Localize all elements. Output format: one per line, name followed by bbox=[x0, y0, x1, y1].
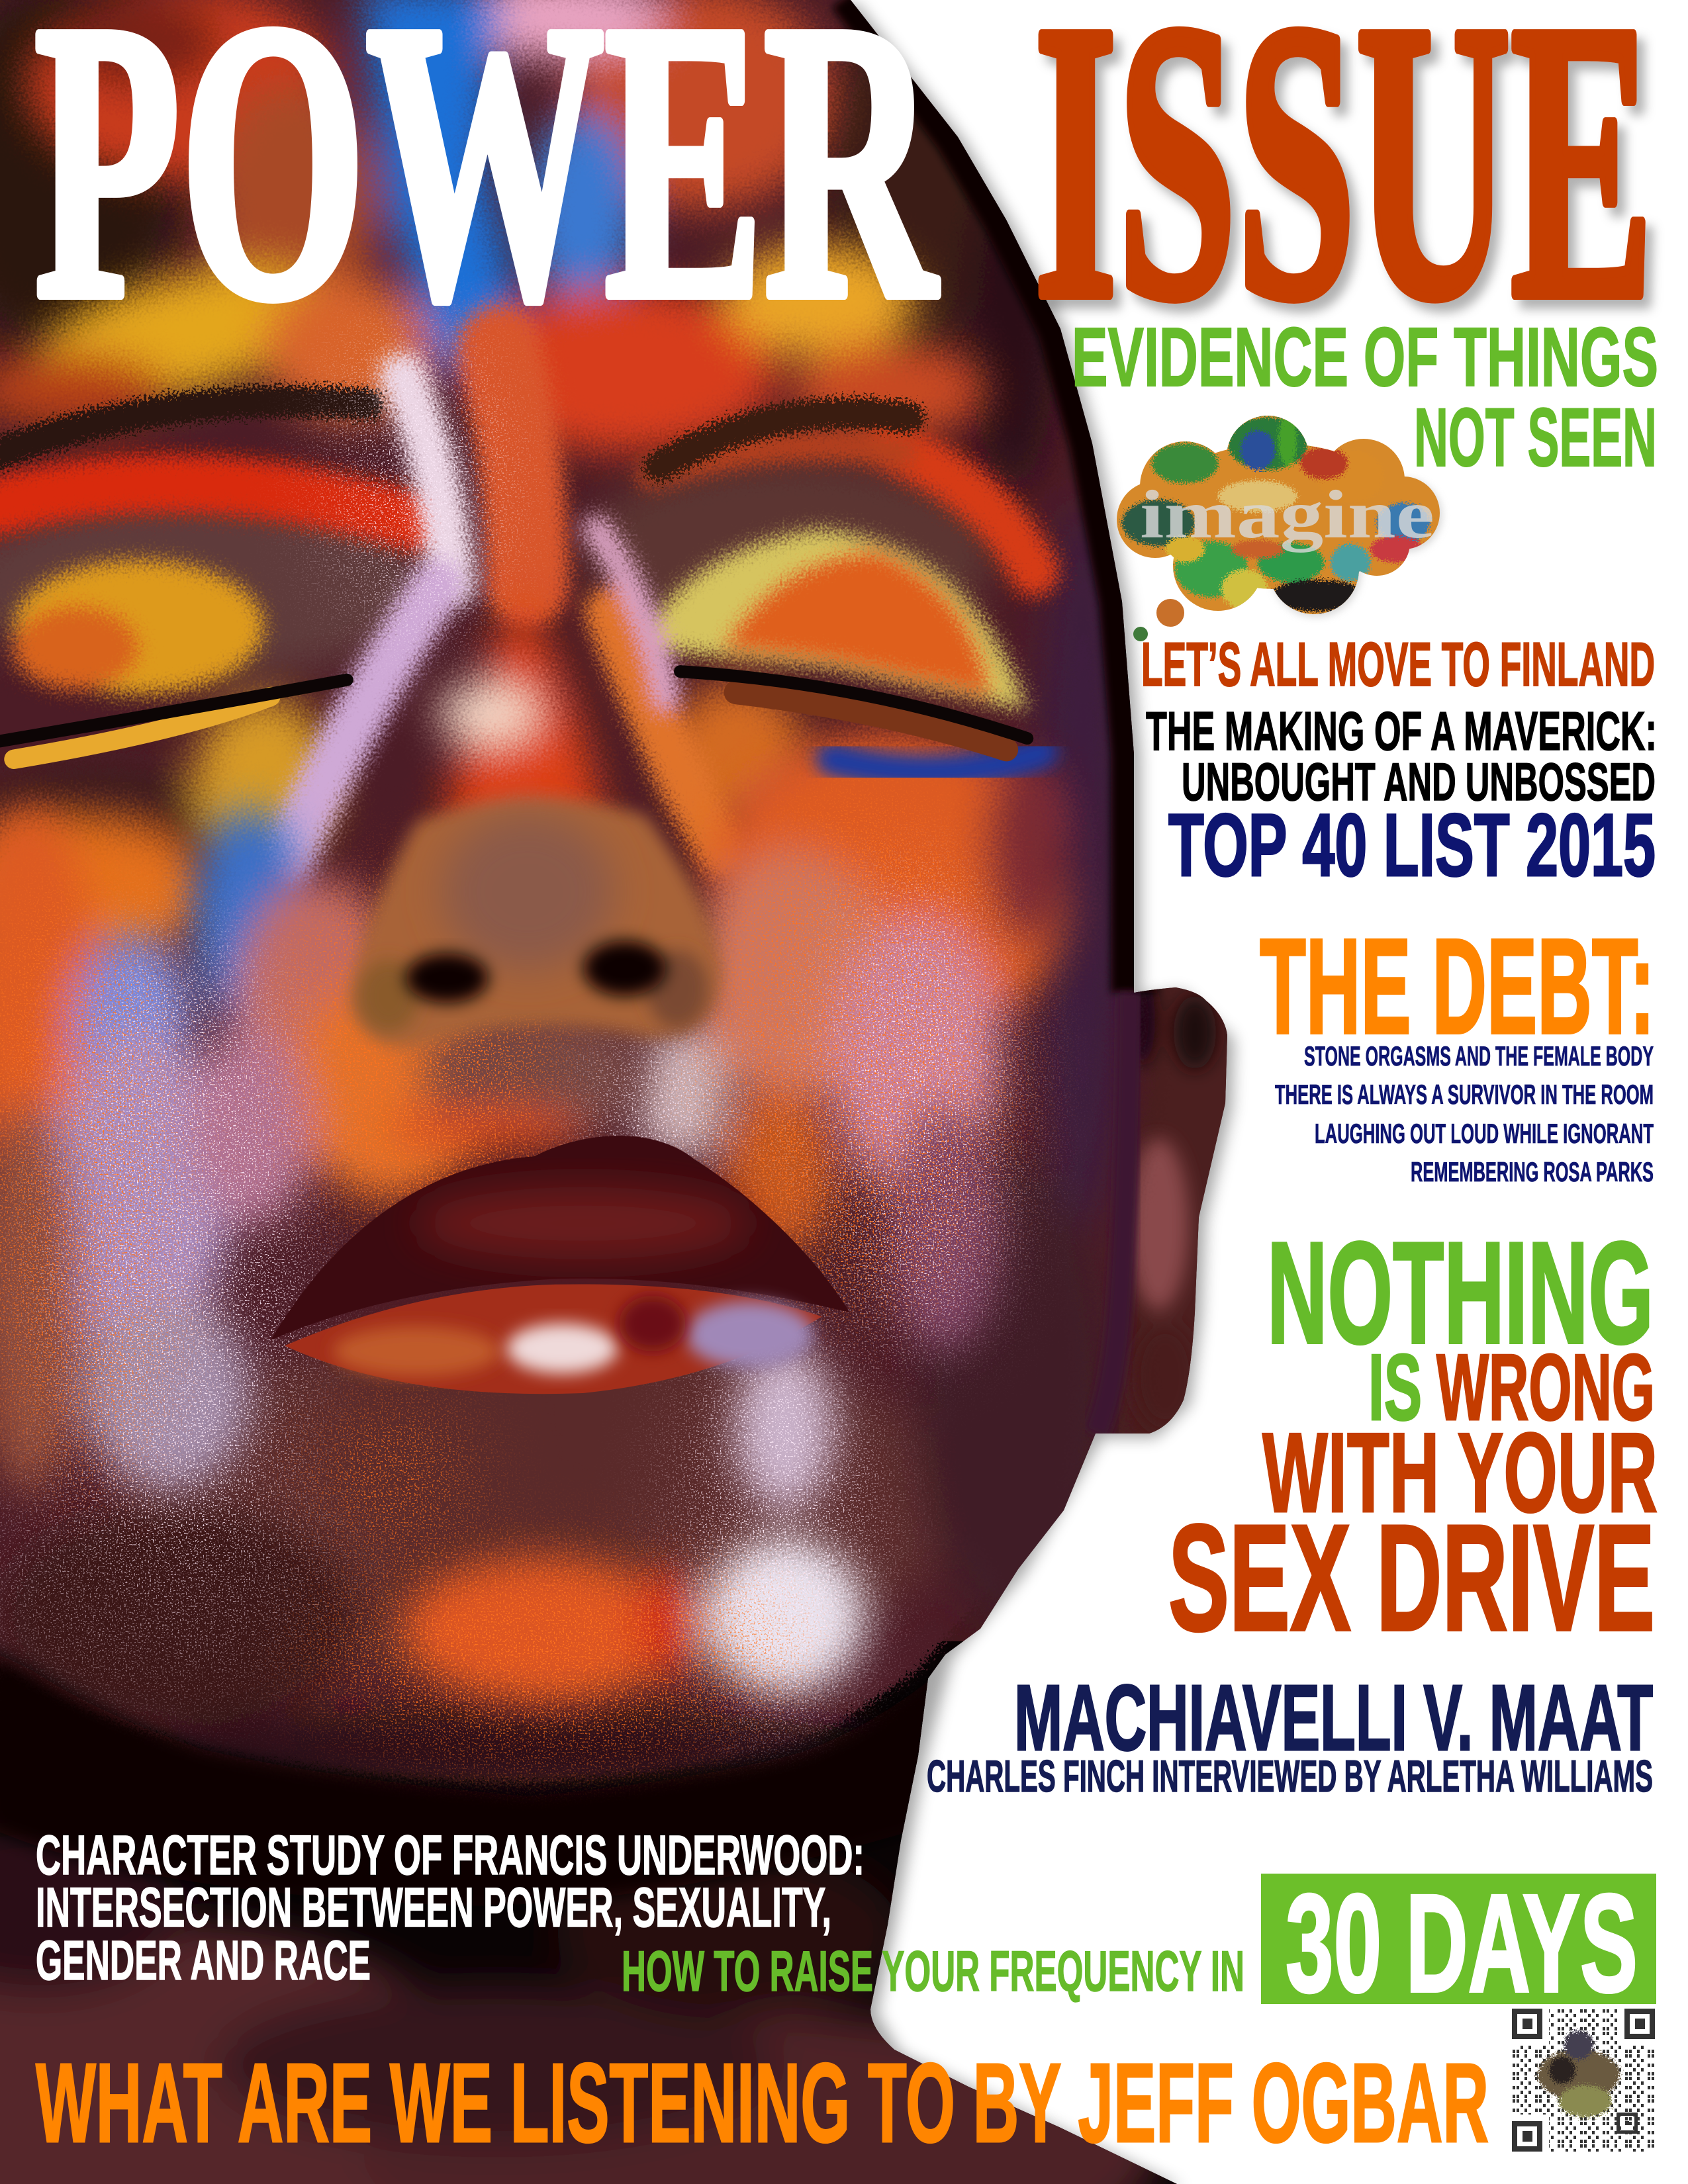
skin base bbox=[851, 0, 1227, 2184]
head drop shadow bbox=[7, 4, 1234, 2184]
QR code bbox=[1512, 2009, 1655, 2152]
powder speckle: white bbox=[0, 0, 1258, 2184]
nose orange powder bbox=[439, 599, 611, 933]
eyebrows bbox=[0, 402, 910, 467]
lower lip bbox=[285, 1284, 821, 1394]
facial features bbox=[0, 672, 1041, 1394]
article list: the debt bbox=[1275, 1040, 1654, 1187]
nose bbox=[350, 799, 722, 1048]
headline: is: IS bbox=[1368, 1335, 1422, 1440]
jaw shadow bbox=[0, 1648, 993, 1906]
powder speckle: orange bbox=[0, 0, 1258, 2184]
face edge near ear bbox=[1096, 993, 1130, 1433]
brow red bands bbox=[0, 446, 1034, 571]
QR centre cloud bbox=[1538, 2030, 1620, 2117]
painted face with powder bbox=[0, 0, 1131, 1788]
story text: Francis Underwood: CHARACTER STUDY OF FRANCIS UNDERWOOD: bbox=[36, 1824, 865, 1886]
nose bridge powder bbox=[285, 348, 722, 864]
upper lip area and philtrum bbox=[389, 1003, 645, 1148]
forehead colours bbox=[0, 0, 986, 453]
small thought bubble bbox=[1156, 598, 1185, 627]
portrait photo: painted face bbox=[0, 0, 1227, 2184]
story text: Francis Underwood bbox=[36, 1824, 865, 1991]
under-eye colour bbox=[0, 682, 1055, 961]
face silhouette tint bbox=[0, 0, 1131, 1788]
left cheek bbox=[0, 808, 486, 1490]
right eyelash bbox=[680, 672, 1041, 772]
callout: how to raise your frequency: HOW TO RAISE YOUR FREQUENCY IN bbox=[622, 1940, 1244, 2003]
dark edge rim bbox=[851, 0, 1134, 993]
lower face skin tones bbox=[0, 0, 1130, 1788]
imagine lettering: imagine bbox=[1140, 477, 1434, 553]
story text: Francis Underwood: INTERSECTION BETWEEN POWER, SEXUALITY, bbox=[36, 1876, 831, 1938]
ear bbox=[1119, 973, 1238, 1443]
upper lip bbox=[271, 1136, 849, 1340]
icon: imagine thought cloud bbox=[1105, 404, 1450, 641]
smallest thought bubble bbox=[1133, 627, 1148, 641]
left eyelash bbox=[0, 680, 347, 759]
right cheek bbox=[633, 731, 1069, 1351]
story text: Francis Underwood: GENDER AND RACE bbox=[36, 1929, 371, 1991]
eye sockets bbox=[0, 455, 1000, 682]
neck and shoulder bbox=[0, 1641, 1258, 2184]
chin powder bbox=[402, 1344, 865, 1702]
eye shadow bbox=[14, 529, 1027, 711]
